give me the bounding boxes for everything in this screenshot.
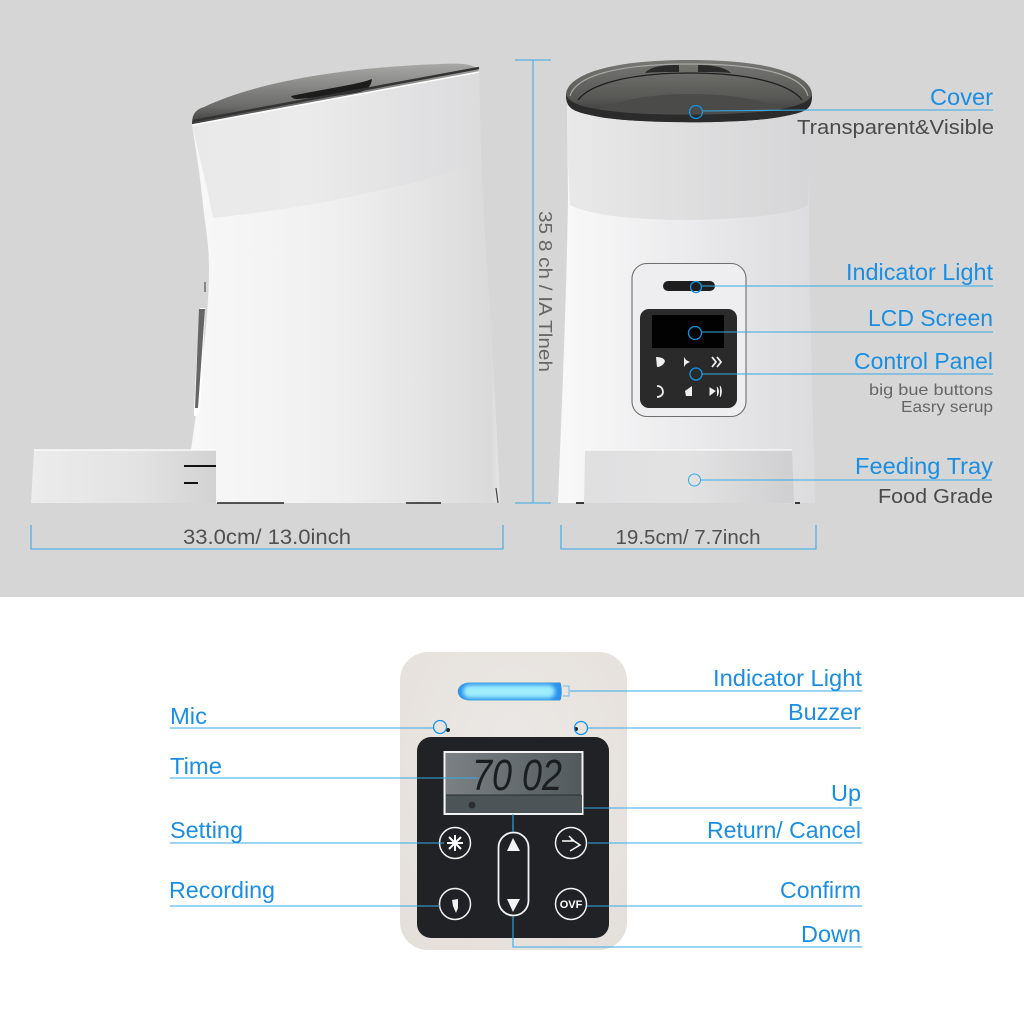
callout: Control Panel: Control Panel [854, 348, 993, 374]
front view feet [576, 502, 800, 504]
keypad [417, 737, 609, 938]
label: Mic [170, 703, 446, 734]
front control plate [632, 264, 746, 416]
label: Buzzer [574, 699, 861, 734]
side view of feeder [31, 64, 500, 503]
side view body [191, 72, 500, 503]
label: Return/ Cancel: Return/ Cancel [707, 817, 861, 843]
buzzer hole [574, 727, 578, 731]
callout: Control Panel: big bue buttons [869, 382, 993, 399]
label: Time: Time [170, 753, 222, 779]
callout: Cover: Transparent&Visible [797, 117, 994, 139]
callout: Control Panel: Easry serup [901, 399, 993, 416]
callout: Cover: Cover [930, 84, 993, 110]
callout: Feeding Tray: Food Grade [878, 486, 993, 508]
recording button [440, 888, 470, 920]
callout: Indicator Light [690, 259, 994, 292]
label: Down: Down [801, 921, 861, 947]
side view lid [192, 64, 479, 125]
label: Confirm: Confirm [780, 877, 861, 903]
width dimension: front: 19.5cm/ 7.7inch [616, 527, 760, 549]
control plate closeup [400, 652, 627, 950]
front view of feeder [558, 60, 815, 503]
label: Setting: Setting [170, 817, 243, 843]
label: Up: Up [831, 780, 861, 806]
side view feet [217, 502, 441, 504]
front indicator pill [663, 281, 715, 291]
lcd screen: 70 02 [472, 751, 562, 800]
width dimension: side: 33.0cm/ 13.0inch [183, 526, 351, 549]
callout: Feeding Tray: Feeding Tray [855, 453, 994, 479]
front view upper band [567, 100, 811, 220]
callout: Cover [690, 84, 994, 139]
front dark keypad [640, 309, 737, 408]
front screen [652, 315, 724, 348]
callout: Control Panel [690, 348, 993, 416]
callout: Feeding Tray [688, 453, 994, 508]
blue indicator light [457, 682, 569, 701]
confirm button: OVF [560, 899, 583, 911]
panel: product dimensions background [0, 0, 1024, 597]
front view tray [584, 450, 794, 503]
front keypad icons [656, 357, 722, 397]
height dimension line [515, 60, 551, 503]
up down rocker [498, 832, 528, 916]
label: Down [513, 916, 862, 947]
front view lid [566, 60, 812, 122]
label: Mic: Mic [170, 703, 207, 729]
label: Recording: Recording [169, 877, 275, 903]
front view body [558, 100, 815, 503]
side view upper band [192, 72, 481, 218]
callout: LCD Screen: LCD Screen [868, 305, 993, 331]
side view tray [31, 450, 216, 503]
confirm button [556, 888, 586, 920]
label: Buzzer: Buzzer [788, 699, 861, 725]
height dimension text: 35 8 ch / IA Tlneh [535, 211, 555, 372]
side view port [194, 282, 206, 416]
lcd screen [444, 751, 582, 814]
label: Indicator Light: Indicator Light [713, 665, 863, 691]
setting button [440, 828, 470, 858]
width dimension: front [561, 525, 816, 549]
return button [556, 828, 586, 858]
callout: LCD Screen [688, 305, 993, 340]
mic hole [446, 728, 450, 732]
label: Up [513, 780, 862, 832]
width dimension: side [31, 525, 503, 549]
callout: Indicator Light: Indicator Light [846, 259, 994, 285]
